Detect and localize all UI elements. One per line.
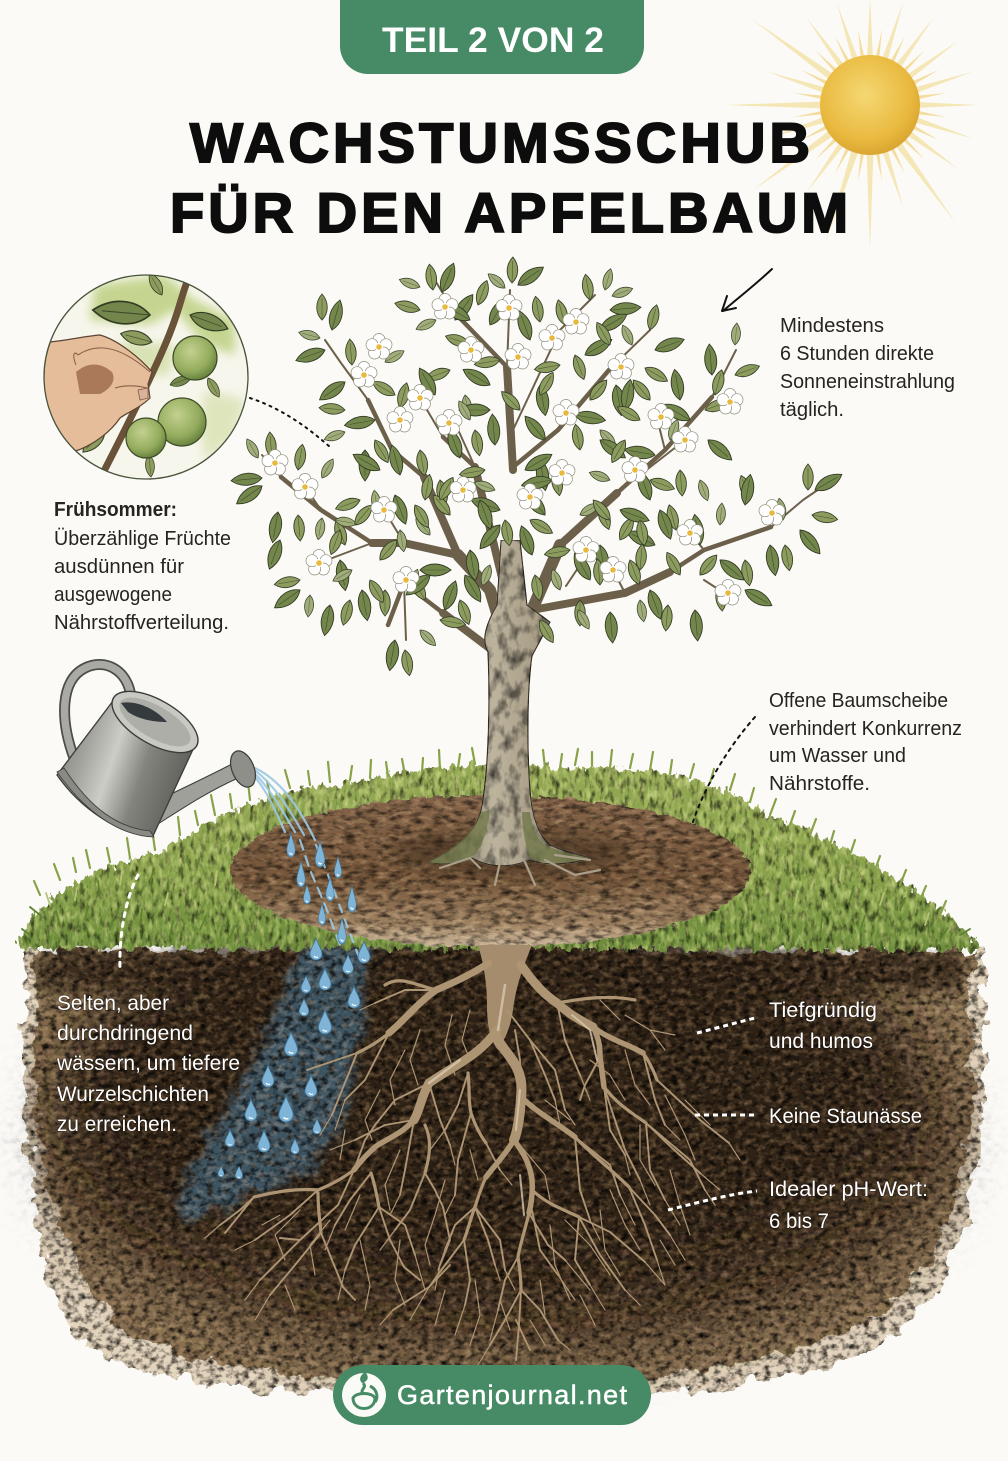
branch [103, 282, 187, 473]
text: soil depth: und humos [769, 1030, 873, 1053]
text: sunlight: täglich. [780, 399, 844, 421]
tree [231, 257, 845, 885]
soil cross-section [24, 900, 984, 1398]
dotted leader: inset to tree [250, 398, 330, 447]
text: soil pH: 6 bis 7 [769, 1210, 829, 1233]
part badge [340, 0, 644, 74]
title: WACHSTUMSSCHUB [190, 111, 810, 174]
text: soil depth: Tiefgründig [769, 999, 877, 1022]
footer badge [333, 1365, 651, 1425]
water stream and drops [218, 768, 370, 1179]
watercolour wash [90, 275, 245, 460]
arrow: sunlight [722, 269, 772, 311]
text: soil depth [769, 999, 877, 1053]
roots [205, 945, 740, 1365]
icon: sun [725, 0, 978, 250]
sprinkler head [226, 747, 260, 791]
drops above ground [287, 833, 295, 857]
spout [146, 764, 238, 824]
text: early summer thinning: Nährstoffverteilung. [54, 612, 229, 634]
text: early summer thinning: Frühsommer: [54, 499, 177, 521]
text: deep watering: durchdringend [57, 1022, 193, 1045]
text: deep watering: wässern, um tiefere [56, 1052, 240, 1075]
part badge: TEIL 2 VON 2 [382, 21, 604, 60]
trunk [428, 540, 590, 866]
text: sunlight: Sonneneinstrahlung [780, 371, 955, 393]
dotted leader: tree disc [693, 717, 755, 822]
text: sunlight: Mindestens [780, 315, 884, 337]
leaves [92, 299, 151, 326]
title: FÜR DEN APFELBAUM [170, 181, 848, 244]
mulched tree disc [230, 795, 750, 947]
text: open tree disc [769, 690, 962, 795]
text: soil pH [769, 1178, 928, 1233]
dotted leader: watering [120, 875, 138, 970]
text: open tree disc: Nährstoffe. [769, 773, 870, 795]
text: early summer thinning: Überzählige Früchte [54, 528, 231, 550]
leaves [231, 257, 845, 677]
text: early summer thinning: ausdünnen für [54, 556, 184, 578]
text: deep watering: Selten, aber [57, 992, 169, 1015]
hand [41, 335, 152, 452]
base roots [440, 855, 600, 885]
text: sunlight [780, 315, 955, 421]
body [57, 697, 195, 836]
apples [126, 336, 217, 458]
text: early summer thinning [54, 499, 231, 634]
drops in soil [310, 938, 322, 960]
dotted leaders: soil notes [668, 1018, 757, 1210]
branches [262, 282, 825, 650]
stream [248, 768, 360, 960]
text: deep watering [56, 992, 240, 1136]
text: no waterlogging: Keine Staunässe [769, 1105, 922, 1128]
text: deep watering: zu erreichen. [57, 1113, 177, 1136]
water seepage [178, 945, 372, 1222]
text: soil pH: Idealer pH-Wert: [769, 1178, 928, 1201]
inset: thinning fruit [41, 271, 248, 479]
blossoms [262, 294, 785, 605]
watering can [57, 665, 260, 837]
text: early summer thinning: ausgewogene [54, 584, 172, 606]
grass blades [22, 748, 970, 940]
footer badge: Gartenjournal.net [397, 1380, 627, 1410]
root stock [478, 945, 532, 1050]
title [170, 111, 848, 244]
text: deep watering: Wurzelschichten [57, 1083, 209, 1106]
icon: sprout logo [342, 1372, 386, 1417]
text: sunlight: 6 Stunden direkte [780, 343, 934, 365]
text: open tree disc: Offene Baumscheibe [769, 690, 948, 712]
grass mound [18, 764, 982, 950]
text: open tree disc: um Wasser und [769, 745, 906, 767]
handle [65, 665, 131, 758]
rim and opening [102, 679, 208, 765]
text: open tree disc: verhindert Konkurrenz [769, 718, 962, 740]
